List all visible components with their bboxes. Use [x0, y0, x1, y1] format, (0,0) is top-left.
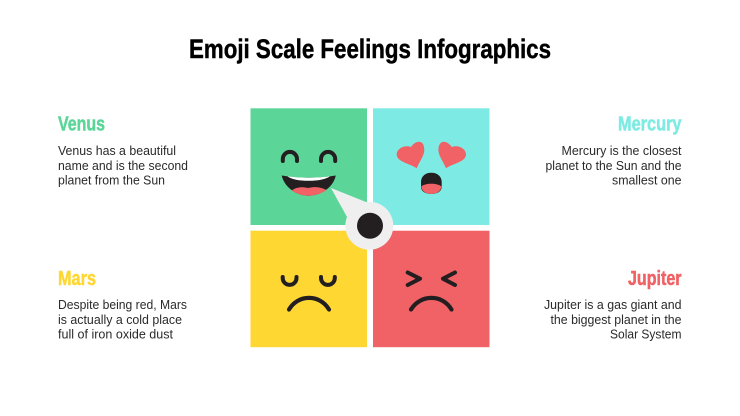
- body: Mercury: Mercury is the closest: [562, 143, 682, 158]
- body: Mars: is actually a cold place: [58, 312, 182, 327]
- body: Mars: [58, 297, 187, 342]
- body: Mercury: planet to the Sun and the: [546, 158, 682, 173]
- icon: dial pointer: [331, 188, 393, 250]
- heading: Venus: Venus: [58, 114, 105, 136]
- body: Venus: name and is the second: [58, 158, 188, 173]
- icon: heart eyes face: [397, 142, 466, 194]
- panel: green square: [250, 108, 367, 225]
- body: Jupiter: [544, 297, 682, 342]
- panel: cyan square: [373, 108, 490, 225]
- body: Mercury: [546, 143, 682, 188]
- icon: angry face: [408, 272, 455, 310]
- heading: Jupiter: Jupiter: [628, 268, 682, 290]
- body: Jupiter: Solar System: [610, 326, 682, 342]
- heading: Mars: Mars: [58, 268, 96, 290]
- body: Jupiter: the biggest planet in the: [550, 312, 682, 327]
- body: Venus: [58, 143, 188, 188]
- heading: Mercury: Mercury: [618, 114, 682, 136]
- panel: Mercury text: [546, 114, 682, 188]
- panel: Venus text: [58, 114, 188, 188]
- icon: happy face: [282, 152, 336, 196]
- panel: red square: [373, 231, 490, 347]
- body: Mars: Despite being red, Mars: [58, 297, 187, 312]
- icon: sad face: [283, 277, 335, 310]
- panel: yellow square: [250, 231, 367, 347]
- body: Venus: Venus has a beautiful: [58, 143, 176, 158]
- panel: Jupiter text: [544, 268, 682, 342]
- body: Mercury: smallest one: [612, 172, 682, 188]
- body: Venus: planet from the Sun: [58, 172, 165, 188]
- body: Jupiter: Jupiter is a gas giant and: [544, 297, 682, 312]
- body: Mars: full of iron oxide dust: [58, 326, 173, 342]
- panel: Mars text: [58, 268, 187, 342]
- title: Emoji Scale Feelings Infographics: [189, 34, 551, 64]
